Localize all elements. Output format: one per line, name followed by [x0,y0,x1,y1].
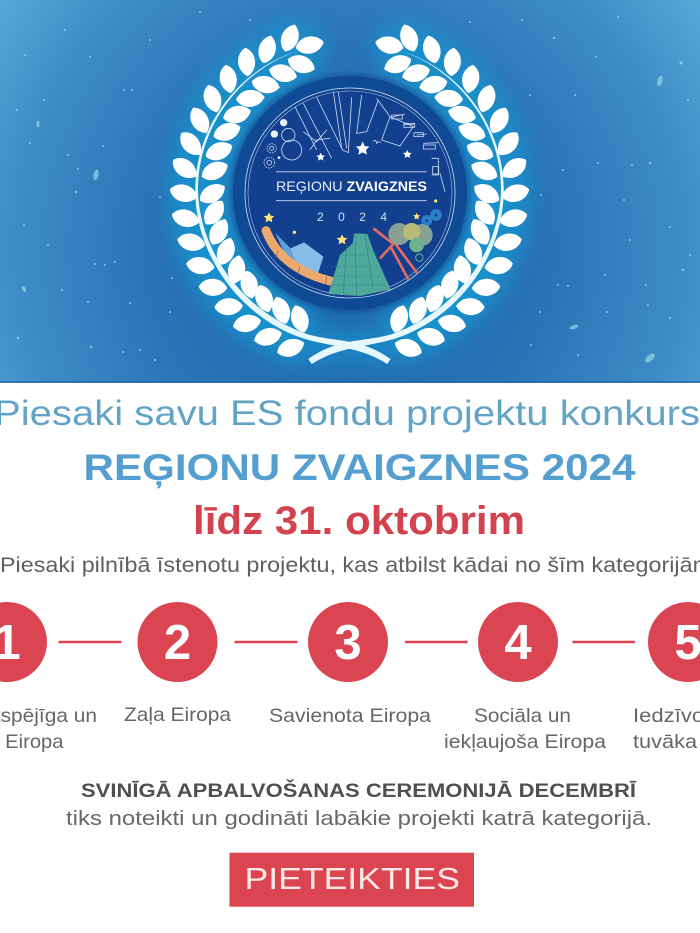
blue gears [423,211,440,224]
step 1 [0,602,47,682]
step 2: 2 [164,616,191,670]
label 4 [444,705,606,753]
title rules [276,172,427,201]
badge: Reģionu Zvaigznes 2024 [233,76,467,310]
label 4: Sociāla un [474,705,571,727]
category labels [0,704,700,753]
connector lines [58,641,635,643]
yellow stars [264,199,437,244]
badge year: 2024 [317,210,387,224]
green towers [328,233,391,296]
intro heading: Piesaki savu ES fondu projektu konkurs [0,394,700,433]
glowing flowers [271,119,287,138]
train [266,231,352,285]
wind turbines [373,228,417,279]
instruction text: Piesaki pilnībā īstenotu projektu, kas atbilst kādai no šīm kategorijām [0,554,700,577]
badge title: REĢIONU ZVAIGZNES [276,178,427,194]
button: PIETEIKTIES [244,861,460,896]
label 2: Zaļa Eiropa [124,704,231,726]
hero background panel [0,0,700,383]
badge shadow [227,70,473,316]
ceremony text: tiks noteikti un godināti labākie projekti katrā kategorijā. [66,807,652,830]
label 4: iekļaujoša Eiropa [444,731,606,753]
button [230,853,474,907]
ceremony heading: SVINĪGĀ APBALVOŠANAS CEREMONIJĀ DECEMBRĪ [81,780,637,802]
deadline: līdz 31. oktobrim [193,499,525,543]
left branch [168,22,391,364]
line art: upper illustrations [264,92,445,192]
white stars [278,142,412,161]
step 4: 4 [504,616,532,670]
step 3: 3 [334,616,362,670]
step 3 [308,602,388,682]
label 5 [633,705,700,753]
hills [275,233,323,278]
laurel wreath [168,22,531,364]
category timeline [0,602,700,682]
tree blobs [388,223,433,261]
label 3: Savienota Eiropa [269,705,431,727]
title: competition name: REĢIONU ZVAIGZNES 2024 [84,447,636,488]
step 5 [648,602,700,682]
step 4 [478,602,558,682]
label 1 [0,705,97,753]
right branch [308,22,531,364]
step 2 [138,602,218,682]
